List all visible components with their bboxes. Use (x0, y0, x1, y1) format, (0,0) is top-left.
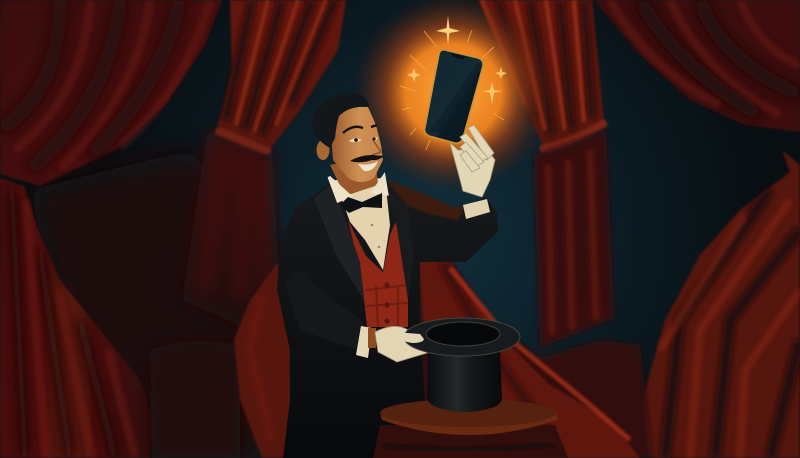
bow tie (340, 193, 382, 213)
face (330, 107, 383, 182)
panel: inner left curtain, lower section (182, 130, 278, 330)
sparkles and light rays (400, 16, 507, 150)
panel: far-right lower drape (640, 150, 800, 458)
magician (277, 93, 498, 458)
panel: inner right curtain, upper section (478, 0, 606, 152)
panel: far-left backdrop curtain (30, 150, 270, 458)
hand thumb over hat brim (395, 332, 424, 343)
shirt front (335, 178, 390, 270)
smile (358, 161, 378, 171)
pedestal table (373, 399, 568, 458)
top hat (404, 318, 520, 412)
waistcoat buttons (384, 282, 390, 324)
waistcoat (348, 218, 408, 327)
ear (316, 140, 330, 160)
lower cuff (356, 326, 372, 358)
panel: top-left swag curtain (0, 0, 222, 186)
panel: red drape behind hat on the right (418, 250, 652, 458)
glow behind phone (355, 0, 551, 194)
neck (330, 155, 378, 196)
panel: centre-left floor drape (150, 341, 240, 458)
forearm sleeve (285, 270, 364, 352)
raised cuff (463, 199, 490, 219)
watch band (368, 328, 376, 348)
eyes (349, 137, 378, 142)
moustache (350, 155, 384, 162)
panel: red drape behind magician left (234, 262, 292, 458)
left lapel (314, 184, 364, 300)
right lapel (386, 190, 414, 300)
raised glove (450, 125, 495, 197)
hair (312, 93, 369, 148)
panel: top-right swag curtain (594, 0, 800, 132)
eyebrows (343, 125, 377, 133)
nose shadow (372, 140, 381, 155)
velvet sleeve highlight (386, 180, 466, 220)
glowing phone (424, 50, 483, 143)
panel: far-left lower drape (0, 178, 155, 458)
panel: inner left curtain, upper section (216, 0, 346, 152)
tailcoat body (277, 180, 498, 458)
collar (329, 176, 387, 201)
shirt studs (371, 224, 380, 248)
panel: inner right curtain, lower section (534, 130, 614, 348)
lower glove (375, 326, 427, 362)
